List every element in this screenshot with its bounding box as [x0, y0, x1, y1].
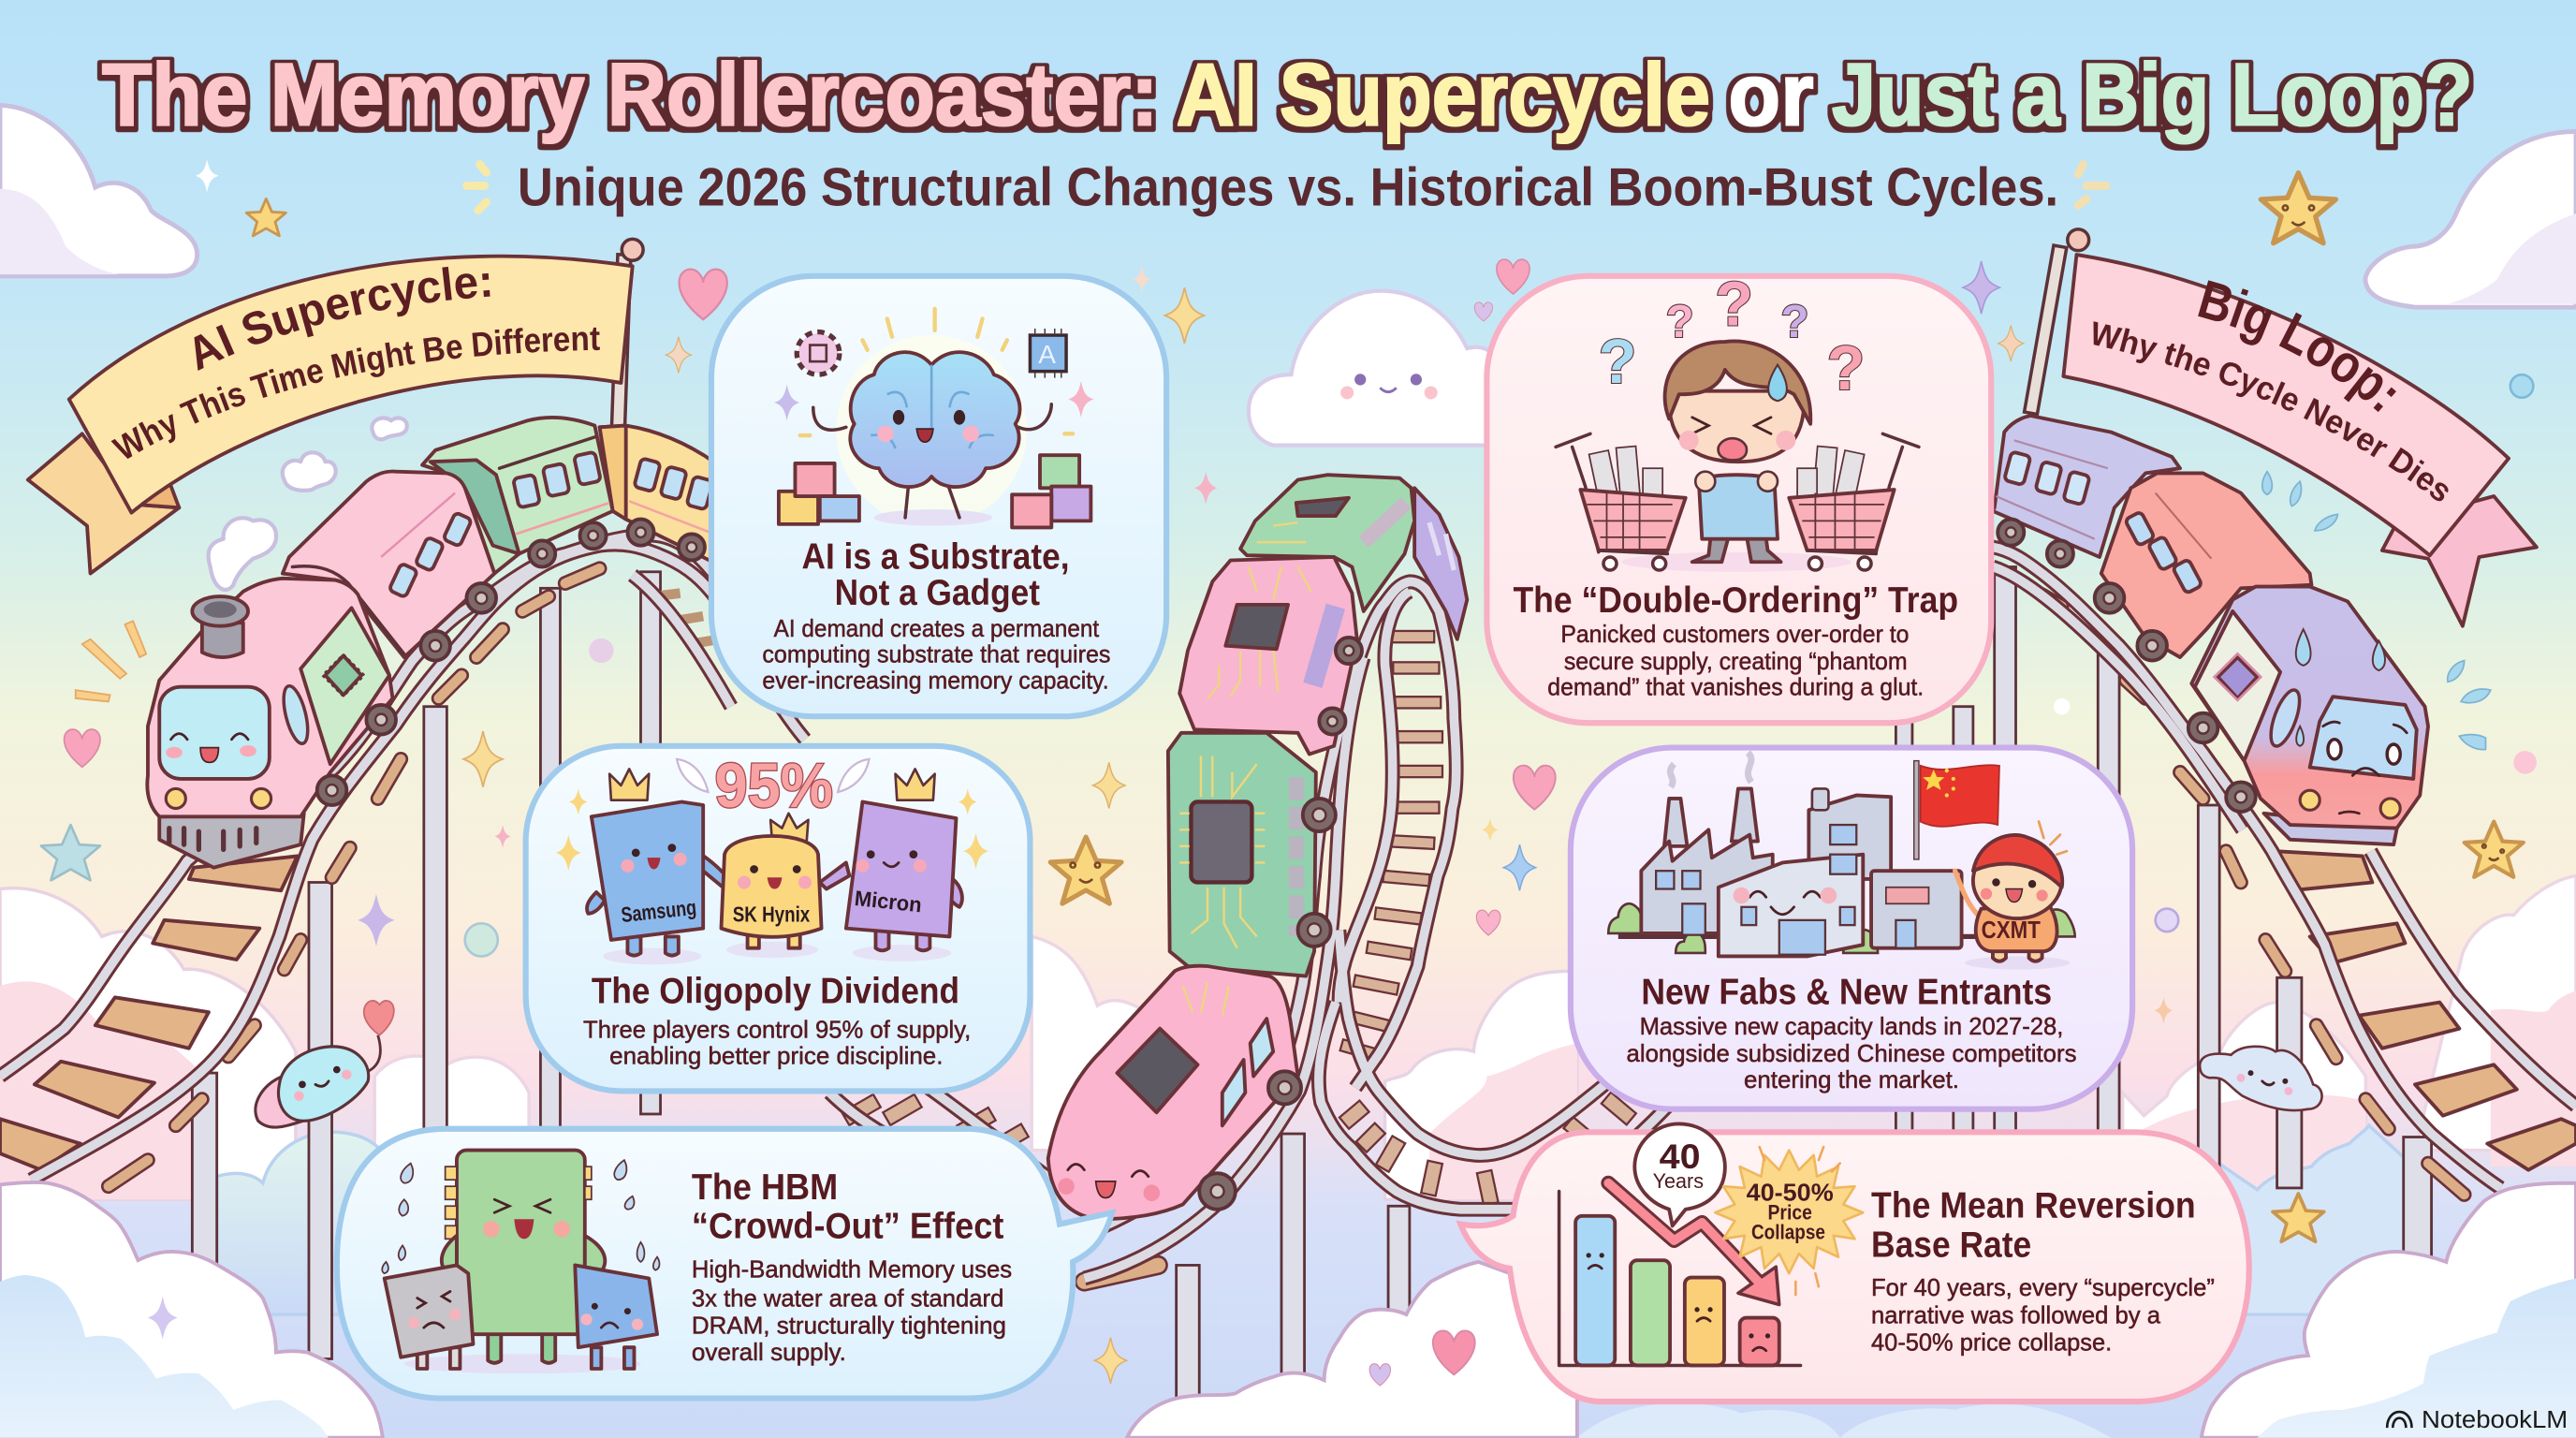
icon: blue DRAM chip	[575, 1265, 657, 1369]
right coaster track	[1993, 547, 2576, 1195]
text block: enabling better price discipline.	[609, 1043, 943, 1069]
heading	[1871, 1186, 2196, 1266]
callout: price collapse burst: Price	[1767, 1200, 1812, 1224]
smiling cloud center	[1249, 291, 1495, 446]
right train	[1993, 416, 2428, 844]
background clouds	[0, 875, 2576, 1438]
text block	[762, 616, 1110, 694]
car: yellow	[600, 426, 723, 567]
text block: 40-50% price collapse.	[1871, 1330, 2112, 1357]
icon: Chinese flag	[1914, 761, 1999, 859]
icon: crowns	[609, 769, 935, 842]
car: lavender	[1993, 416, 2180, 567]
panel: Mean Reversion Base Rate	[1460, 1123, 2249, 1401]
heading: The Oligopoly Dividend	[592, 972, 959, 1012]
locomotive: happy	[147, 579, 396, 868]
text block: AI demand creates a permanent	[774, 616, 1099, 642]
car: pink front	[1048, 966, 1301, 1219]
mascot: blue blob with balloon	[256, 1001, 394, 1127]
car: pink	[283, 471, 496, 661]
text block	[1627, 1014, 2076, 1093]
heading: The Mean Reversion	[1871, 1186, 2196, 1226]
decorations: hearts	[65, 259, 1556, 1386]
icon: rays and sparkles	[774, 309, 1093, 435]
text block: High-Bandwidth Memory uses	[692, 1257, 1012, 1284]
title	[102, 45, 2472, 144]
mascot: small cloud	[2200, 1047, 2322, 1110]
callout: price collapse burst	[1715, 1147, 1863, 1295]
text block: alongside subsidized Chinese competitors	[1627, 1041, 2076, 1067]
icon: blocks left	[779, 463, 859, 524]
callout: 40 years	[1634, 1123, 1725, 1225]
icon: small sparkles	[556, 788, 988, 871]
text block: demand” that vanishes during a glut.	[1547, 674, 1924, 700]
decorations: stars	[41, 173, 2524, 1241]
panel: New Fabs and New Entrants	[1571, 748, 2132, 1109]
title: AI Supercycle	[1177, 45, 1710, 144]
text block: DRAM, structurally tightening	[692, 1313, 1006, 1339]
callout: price collapse burst: 40-50%	[1747, 1180, 1834, 1206]
text block: secure supply, creating “phantom	[1564, 649, 1908, 675]
icon: brain character	[813, 335, 1051, 526]
text block: Panicked customers over-order to	[1560, 622, 1909, 648]
text block: ever-increasing memory capacity.	[762, 668, 1109, 694]
panel: AI is a Substrate	[711, 276, 1166, 716]
icon: Samsung character: Samsung	[620, 895, 697, 927]
upper left cloud	[0, 105, 198, 276]
text block: overall supply.	[692, 1340, 846, 1366]
car: coral	[2095, 473, 2311, 661]
cloud: bottom left	[0, 1182, 383, 1438]
text block	[1871, 1275, 2215, 1357]
roller coaster supports	[192, 567, 2432, 1413]
decorations: bubbles and confetti	[76, 165, 2537, 956]
cloud: bottom center	[1127, 1262, 1577, 1438]
center loop track	[829, 581, 1725, 1282]
text block	[1547, 622, 1924, 700]
banner: Big Loop: Big Loop:	[2198, 280, 2396, 412]
heading: New Fabs & New Entrants	[1641, 972, 2052, 1012]
icon: SK Hynix character: SK Hynix	[733, 902, 811, 927]
decorations: sparkles	[148, 159, 2173, 1384]
text block: 3x the water area of standard	[692, 1285, 1003, 1312]
icon: question marks: ?	[1715, 271, 1753, 340]
text block: For 40 years, every “supercycle”	[1871, 1275, 2215, 1301]
icon: question marks: ?	[1781, 297, 1809, 347]
heading	[801, 536, 1070, 613]
text block: Three players control 95% of supply,	[583, 1018, 971, 1044]
title: or	[1728, 45, 1814, 144]
icon: AI chip: A	[1038, 340, 1056, 369]
cloud: bottom right	[2202, 1183, 2576, 1438]
small clouds	[209, 418, 407, 590]
icon: gear	[798, 333, 838, 373]
icon: sweat drops	[382, 1160, 659, 1273]
text block	[692, 1257, 1012, 1366]
icon: CXMT mascot	[1955, 822, 2070, 970]
banner: Big Loop: Why the Cycle Never Dies	[2093, 321, 2449, 502]
large foreground clouds	[0, 1182, 2576, 1438]
icon: left shopping cart	[1556, 433, 1686, 570]
center train	[1048, 475, 1467, 1219]
panel: Oligopoly Dividend	[526, 746, 1030, 1091]
banner: Big Loop	[2061, 253, 2539, 628]
panel: Double-Ordering Trap	[1486, 271, 1991, 723]
banner: AI Supercycle: Why This Time Might Be Different	[110, 328, 600, 459]
icon: question marks: ?	[1599, 328, 1636, 397]
heading: Base Rate	[1871, 1225, 2031, 1266]
callout: 40 years: Years	[1653, 1169, 1704, 1193]
heading: The “Double-Ordering” Trap	[1513, 580, 1958, 621]
bar chart	[1559, 1191, 1801, 1365]
icon: Micron character: Micron	[854, 886, 923, 917]
heading	[692, 1167, 1003, 1246]
icon: CXMT mascot: CXMT	[1982, 916, 2041, 944]
flag poles	[611, 229, 2089, 433]
left train	[147, 418, 723, 868]
car: green PCB	[1168, 733, 1336, 976]
title: The Memory Rollercoaster:	[102, 45, 1158, 144]
icon: gray DRAM chip	[385, 1265, 473, 1369]
icon: blocks right	[1012, 455, 1090, 527]
locomotive: sad	[2188, 587, 2428, 844]
car: green	[422, 418, 613, 574]
NotebookLM mark: NotebookLM	[2422, 1405, 2568, 1433]
upper right cloud	[2365, 131, 2576, 307]
banner: AI Supercycle	[26, 255, 635, 576]
title: Just a Big Loop?	[1832, 45, 2472, 144]
banner: AI Supercycle: AI Supercycle:	[195, 266, 490, 371]
text block: computing substrate that requires	[762, 641, 1110, 668]
icon: factories	[1608, 753, 2075, 956]
subtitle: Unique 2026 Structural Changes vs. Historical Boom-Bust Cycles.	[518, 157, 2058, 217]
icon: right shopping cart	[1789, 433, 1919, 570]
heading: AI is a Substrate,	[801, 536, 1070, 577]
icon: worried customer	[1621, 341, 1852, 572]
text block	[583, 1018, 971, 1069]
left coaster track	[0, 535, 805, 1186]
icon: question marks: ?	[1827, 334, 1865, 404]
callout: 40 years: 40	[1660, 1137, 1701, 1176]
text block: narrative was followed by a	[1871, 1303, 2161, 1329]
panel: HBM Crowd-Out Effect	[337, 1129, 1112, 1399]
icon: question marks: ?	[1666, 297, 1694, 347]
heading: Not a Gadget	[835, 573, 1040, 613]
icon: Samsung character	[587, 801, 729, 964]
text block: Massive new capacity lands in 2027-28,	[1640, 1014, 2063, 1040]
arrow: falling price	[1608, 1183, 1779, 1305]
car: green top	[1240, 475, 1414, 611]
icon: AI chip	[1030, 329, 1066, 378]
icon: question marks	[1599, 271, 1865, 404]
car: pink upper	[1179, 557, 1362, 755]
callout: 95%	[677, 752, 869, 821]
heading: The HBM	[692, 1167, 838, 1208]
icon: SK Hynix character	[721, 836, 822, 958]
callout: 95%: 95%	[714, 752, 833, 821]
text block: entering the market.	[1744, 1067, 1959, 1093]
icon: green HBM chip	[404, 1151, 640, 1373]
callout: price collapse burst: Collapse	[1751, 1220, 1825, 1243]
icon: Micron character	[820, 801, 962, 961]
car: purple rear	[1414, 488, 1467, 639]
heading: “Crowd-Out” Effect	[692, 1206, 1003, 1246]
